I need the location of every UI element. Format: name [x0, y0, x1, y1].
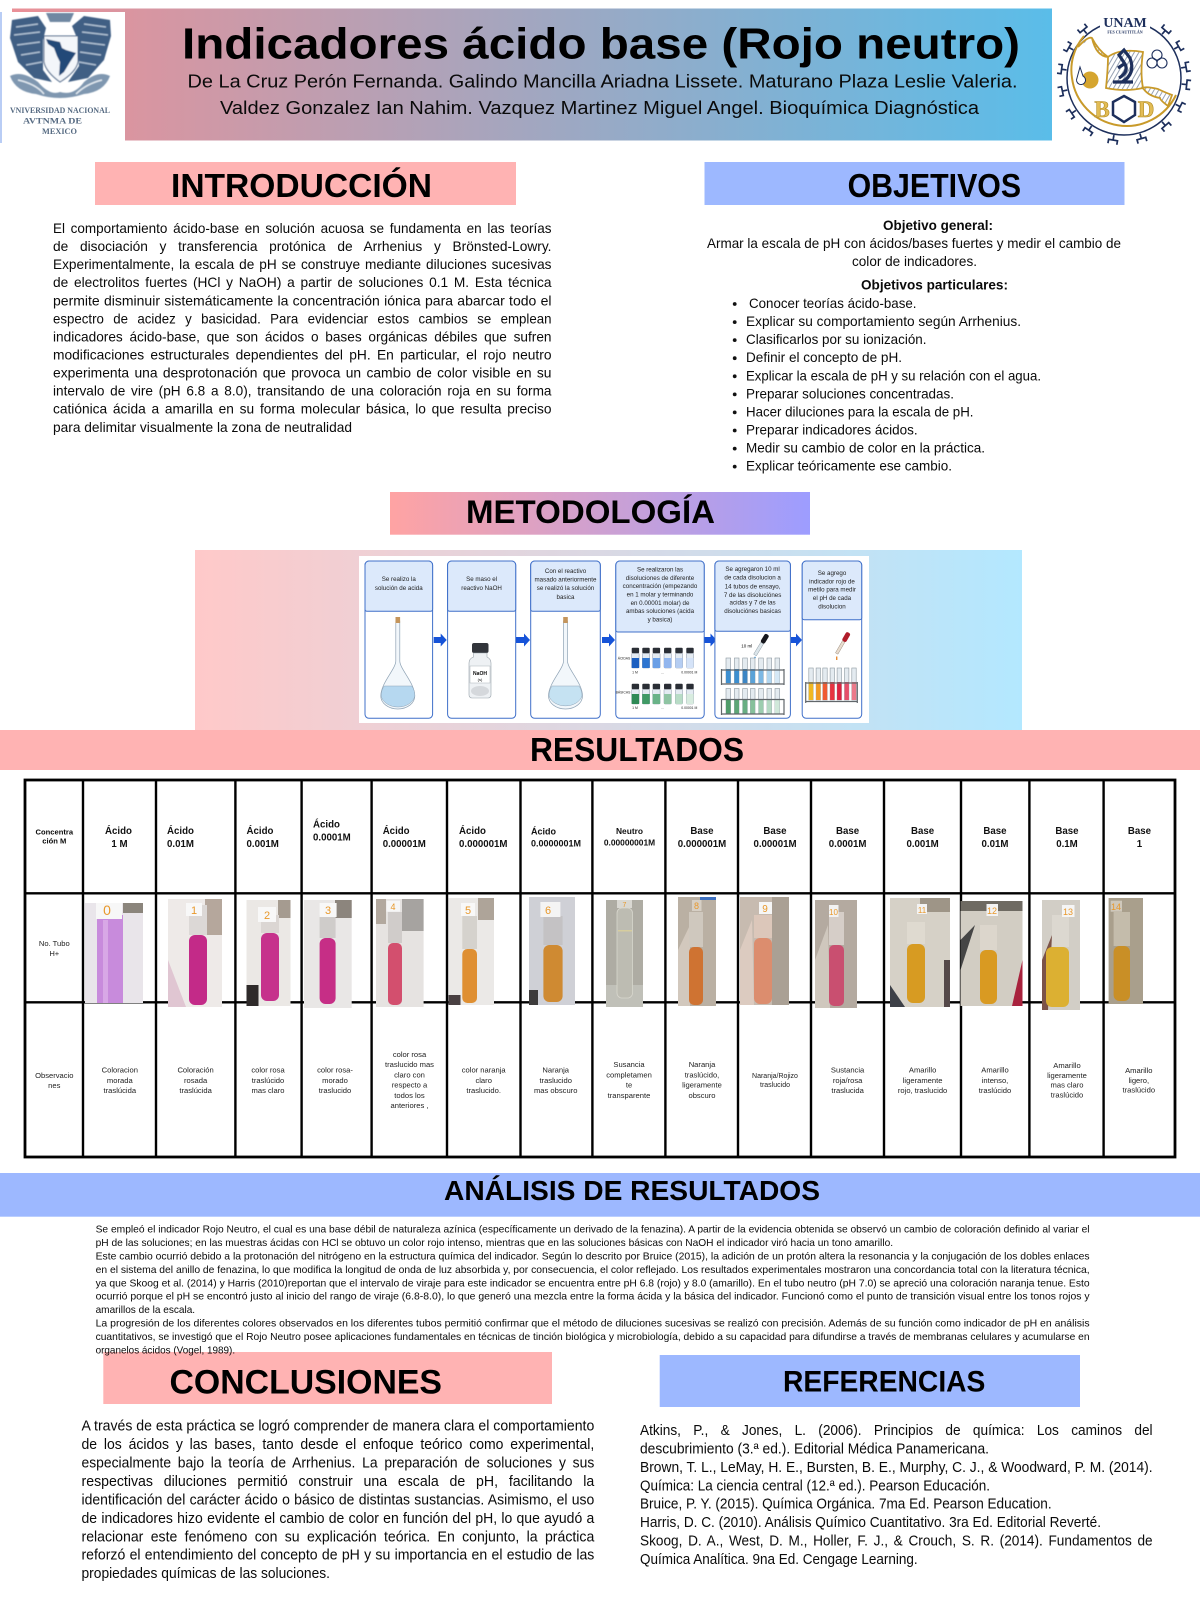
heading: referencias	[660, 1355, 1080, 1407]
photo: tube 4	[376, 899, 424, 1007]
tube rack: blue	[722, 658, 784, 685]
observations row: te	[626, 1081, 632, 1090]
logo: UNAM FES Cuautitlan BQD	[1052, 10, 1200, 145]
step 4: dilutions: concentración (empezando	[623, 583, 698, 590]
step 5: 14 test tubes: 14 tubos de ensayo,	[725, 583, 781, 590]
observations row: morado	[322, 1076, 348, 1085]
step 1: acid solution: solución de acida	[375, 585, 423, 592]
observations row: traslúcido	[1051, 1090, 1083, 1099]
observations row: rosada	[184, 1076, 208, 1085]
table header row: Ácido	[313, 820, 340, 830]
step 4: dilutions: ambas soluciones (acida	[626, 608, 695, 615]
text: objetivo general: Armar la escala de pH con ácidos/bases fuertes y medir el cambio de	[707, 235, 1121, 251]
table header row: Base	[690, 826, 714, 837]
table header row: 0.00001M	[383, 839, 426, 850]
vials: bases	[616, 684, 697, 710]
observations row: traslucido	[539, 1076, 572, 1085]
text block: referencias: Química: La ciencia central (12.ª ed.). Pearson Educación.	[640, 1478, 990, 1494]
step 2: NaOH reagent: NaOH	[473, 671, 487, 677]
step 4: dilutions: disoluciones de diferente	[626, 575, 695, 582]
table header row: Concentra	[36, 828, 74, 836]
table header row: 0.001M	[906, 839, 939, 850]
logo: UNAM FES Cuautitlan BQD: B	[1094, 97, 1110, 122]
step 5: 14 test tubes: Se agregaron 10 ml	[725, 566, 780, 573]
text: objetivos particulares: Definir el concepto de pH.	[746, 349, 902, 365]
observations row: morada	[107, 1076, 133, 1085]
text block: analisis de resultados: en el sistema del anillo de fenazina, lo que modifica la longitud de onda de luz absorbida y, por consecuencia, el color reflejado. Los resultados experimentales mostraron una concordancia total con la literatura técnica,	[96, 1265, 1090, 1276]
table header row: ción M	[42, 836, 66, 846]
observations row: color naranja	[462, 1066, 506, 1075]
text block: introduccion: experimenta una desprotonación que provoca un cambio de color visible en su	[53, 365, 552, 381]
observations row: Naranja	[689, 1060, 716, 1069]
step 6: indicator: el pH de cada	[813, 595, 852, 602]
table header row: Ácido	[167, 826, 194, 837]
photo: tube 5: 5	[465, 905, 471, 917]
observations row: completamen	[606, 1070, 652, 1080]
table header row: 0.000001M	[678, 839, 726, 850]
panel: referencias	[640, 1355, 1153, 1568]
table header row: Base	[836, 826, 860, 837]
photo: tube 8: 8	[694, 901, 699, 911]
logo: UNAM FES Cuautitlan BQD: UNAM	[1103, 16, 1147, 31]
logo: UNAM FES Cuautitlan BQD: D	[1138, 97, 1154, 122]
text block: analisis de resultados: amarillos de la escala.	[96, 1305, 195, 1316]
authors	[188, 72, 1018, 118]
table header row: 0.000001M	[459, 839, 507, 850]
table header row: 0.001M	[246, 839, 279, 850]
photo: tube 1: 1	[191, 905, 197, 917]
crest motto: VNIVERSIDAD NACIONAL	[10, 105, 110, 115]
step 6: indicator: disolucion	[818, 603, 846, 610]
vials: acids	[618, 648, 697, 674]
arrow	[704, 634, 716, 646]
table header row: 0.0000001M	[531, 838, 581, 848]
step 2: NaOH reagent: (s)	[478, 677, 483, 682]
row label: no. tubo	[39, 939, 70, 958]
row label: observaciones	[35, 1071, 74, 1090]
heading: introduccion	[95, 162, 516, 205]
step 2: NaOH reagent: reactivo NaOH	[461, 585, 502, 592]
photo: tube 7 neutral: 7	[623, 902, 627, 909]
row label: observaciones: Observacio	[35, 1071, 74, 1080]
observations row: ligeramente	[682, 1081, 722, 1090]
table header row: 0.00001M	[753, 839, 797, 850]
step 4: dilutions: y basica)	[648, 616, 672, 624]
photo: tube 8	[678, 897, 716, 1006]
text block: referencias: Harris, D. C. (2010). Análisis Químico Cuantitativo. 3ra Ed. Editorial Reverté.	[640, 1515, 1101, 1531]
observations row: obscuro	[688, 1091, 716, 1100]
flow diagram	[359, 556, 869, 723]
text: objetivos particulares: Explicar la escala de pH y su relación con el agua.	[746, 367, 1041, 383]
heading: metodologia: METODOLOGÍA	[466, 494, 715, 530]
step 5: 14 test tubes: 7 de las disoluciónes	[724, 592, 781, 599]
table header row: Base	[983, 826, 1007, 837]
step 4: dilutions	[616, 561, 704, 718]
observations row: traslúcido	[252, 1076, 284, 1085]
text block: conclusiones: respectivas diluciones permitió construir una escala de pH, facilitando la	[82, 1474, 594, 1490]
photo: tube 14: 14	[1111, 902, 1121, 912]
observations row: Naranja	[542, 1066, 570, 1075]
observations row: Coloración	[177, 1066, 214, 1075]
observations row: claro con	[394, 1070, 425, 1080]
observations row: mas obscuro	[534, 1086, 577, 1095]
table header row: 0.01M	[982, 839, 1008, 850]
observations row: roja/rosa	[833, 1076, 863, 1085]
step 2: NaOH reagent: Se maso el	[466, 576, 497, 583]
table header row: Base	[911, 826, 935, 837]
title: Indicadores ácido base (Rojo neutro)	[182, 20, 1020, 68]
text block: introduccion: indicadores ácido-base, que son ácidos o bases orgánicas débiles que sufren	[53, 328, 552, 344]
vials: bases: BÁSICAS	[616, 690, 631, 694]
arrow	[602, 634, 615, 646]
heading: referencias: REFERENCIAS	[783, 1366, 985, 1399]
step 6: indicator	[802, 561, 862, 718]
observations row: Amarillo	[1125, 1066, 1153, 1075]
step 5: 14 test tubes: disoluciónes basicas	[724, 608, 781, 615]
observations row: Susancia	[613, 1060, 645, 1069]
text block: introduccion: modificaciones estructurales dependientes del pH. En particular, el rojo neutro	[53, 346, 552, 362]
header banner	[12, 8, 1052, 140]
icon: dropper	[753, 633, 769, 656]
text block: referencias	[640, 1423, 1153, 1568]
text block: introduccion: intervalo de vire (pH 6.8 a 8.0), transitando de una coloración roja en su forma	[53, 383, 552, 399]
photo: tube 2: 2	[264, 910, 270, 922]
observations row: traslúcido,	[685, 1070, 719, 1080]
step 2: NaOH reagent	[448, 561, 516, 718]
tube rack: indicator colours	[806, 668, 857, 703]
text: objetivos particulares: Conocer teorías ácido-base.	[749, 295, 916, 311]
photo: tube 14	[1109, 898, 1143, 1004]
text: objetivo general: color de indicadores.	[852, 253, 977, 269]
heading: resultados: RESULTADOS	[530, 731, 744, 768]
text block: analisis de resultados: pH de las soluciones; en las muestras ácidas con HCl se obtuvo un color rojo intenso, mientras que en las soluciones básicas con NaOH el indicador viró hacia un tono amarillo.	[96, 1238, 893, 1249]
text block: referencias: descubrimiento (3.ª ed.). Editorial Médica Panamericana.	[640, 1441, 989, 1457]
heading: objetivos	[704, 162, 1124, 205]
icon: red dropper	[835, 632, 851, 655]
photo: tube 9: 9	[762, 904, 768, 915]
heading: conclusiones	[103, 1352, 552, 1404]
photo: tube 3	[304, 900, 352, 1008]
vials: acids: 1 M	[632, 670, 638, 674]
text block: introduccion: para delimitar visualmente la zona de neutralidad	[53, 419, 352, 435]
arrow	[791, 634, 802, 646]
text block: referencias: Bruice, P. Y. (2015). Química Orgánica. 7ma Ed. Pearson Education.	[640, 1497, 1052, 1513]
text block: analisis de resultados: La progresión de los diferentes colores observados en los diferentes tubos permitió confirmar que el método de diluciones sucesivas se realizó con precisión. Además de su función como indicador de pH en análisis	[96, 1318, 1090, 1330]
observations row: claro	[475, 1076, 492, 1085]
step 4: dilutions: en 0.00001 molar) de	[631, 600, 690, 607]
text block: conclusiones: relacionar este fenómeno con su explicación teórica. En conjunto, la práctica	[82, 1529, 594, 1545]
photo: tube 6	[529, 897, 575, 1005]
text block: conclusiones: especialmente bajo la teoría de Arrhenius. La preparación de soluciones y sus	[82, 1456, 594, 1472]
text block: analisis de resultados: organelos ácidos (Vogel, 1989).	[96, 1345, 235, 1356]
text: objetivos particulares: Explicar teóricamente ese cambio.	[746, 458, 952, 474]
table header row	[36, 820, 1152, 850]
table header row: Ácido	[531, 826, 557, 836]
photo: tube 7 neutral	[606, 900, 643, 1007]
step 3: basic solution: se realizó la solución	[537, 585, 595, 592]
text block: referencias: Brown, T. L., LeMay, H. E., Bursten, B. E., Murphy, C. J., & Woodward, P. M. (2014).	[640, 1460, 1153, 1476]
text: objetivos particulares: Medir su cambio de color en la práctica.	[746, 440, 985, 456]
photo: tube 4: 4	[390, 902, 396, 912]
step 5: 14 test tubes: acidas y 7 de las	[730, 599, 776, 606]
photo: tube 9	[740, 897, 789, 1005]
observations row: traslucida	[831, 1086, 865, 1095]
step 1: acid solution: Se realizo la	[382, 576, 416, 583]
text block: conclusiones: de indicadores hizo evidente el cambio de color en función del pH, lo que ayudó a	[82, 1511, 594, 1527]
observations row: traslucido	[760, 1082, 790, 1089]
text: objetivos particulares: Objetivos particulares:	[861, 277, 1008, 293]
table header row: 0.0001M	[313, 832, 351, 844]
step 3: basic solution: basica	[557, 594, 575, 601]
text block: referencias: Química Analítica. 9na Ed. Cengage Learning.	[640, 1552, 918, 1568]
heading: analisis de resultados	[0, 1173, 1200, 1217]
text block: analisis de resultados: Este cambio ocurrió debido a la protonación del nitrógeno en la estructura química del indicador. Según lo descrito por Bruice (2015), la adición de un protón altera la resonancia y la conjugación de los dobles enlaces	[96, 1252, 1090, 1262]
table header row: 0.1M	[1056, 839, 1078, 850]
results table	[25, 780, 1175, 1157]
step 3: basic solution	[531, 561, 600, 718]
authors: De La Cruz Perón Fernanda. Galindo Mancilla Ariadna Lissete. Maturano Plaza Leslie Valeria.	[188, 72, 1018, 92]
step 4: dilutions: Se realizaron las	[637, 566, 683, 574]
step 5: 14 test tubes	[715, 561, 790, 718]
observations row: mas claro	[1051, 1080, 1083, 1090]
table header row: 0.00000001M	[604, 838, 655, 848]
photo: tube 11: 11	[918, 906, 927, 915]
photo: tube 10	[815, 900, 857, 1008]
step 3: basic solution: masado anteriormente	[535, 577, 597, 584]
text: objetivo general	[707, 217, 1121, 269]
authors: Valdez Gonzalez Ian Nahim. Vazquez Martinez Miguel Angel. Bioquímica Diagnóstica	[220, 98, 980, 118]
observations row: Coloracion	[102, 1066, 138, 1075]
text: objetivos particulares: Hacer diluciones para la escala de pH.	[746, 403, 974, 419]
heading: resultados	[0, 730, 1200, 770]
observations row: Sustancia	[831, 1066, 865, 1075]
text block: introduccion: Experimentalmente, la escala de pH se construye mediante diluciones sucesivas	[53, 256, 552, 272]
table header row: Base	[763, 826, 787, 837]
text: objetivos particulares: Preparar soluciones concentradas.	[746, 385, 954, 401]
observations row: Amarillo	[1053, 1061, 1081, 1070]
photo: tube 13: 13	[1063, 907, 1073, 917]
tube rack: green	[722, 688, 784, 715]
observations row	[102, 1050, 1155, 1110]
tube photos	[85, 897, 1143, 1010]
crest motto	[10, 105, 110, 136]
observations row: intenso,	[982, 1076, 1008, 1085]
text block: analisis de resultados: ocurrió porque el pH se encontró justo al inicio del rango de viraje (6.8-8.0), lo que generó una mezcla entre la forma ácida y la básica del indicador. Funcionó como el punto de transición visual entre los tonos rojos y	[96, 1292, 1090, 1303]
vials: bases: 1 M	[632, 706, 638, 710]
heading: objetivos: OBJETIVOS	[848, 167, 1021, 204]
heading: metodologia	[390, 492, 810, 535]
observations row: mas claro	[252, 1086, 284, 1095]
table header row: 1	[1137, 839, 1143, 850]
table header row: Neutro	[616, 826, 643, 836]
observations row: transparente	[608, 1091, 650, 1100]
panel: objetivos	[704, 162, 1124, 474]
text block: analisis de resultados: cuantitativos, se investigó que el Rojo Neutro posee aplicaciones fundamentales en técnicas de tinción biológica y microbiología, debido a su capacidad para difundirse a través de membranas celulares y acumularse en	[96, 1332, 1090, 1343]
step 6: indicator: metilo para medir	[808, 586, 856, 593]
text block: introduccion: de electrolitos fuertes (HCl y NaOH) a partir de soluciones 0.1 M. Esta técnica	[53, 274, 552, 290]
observations row: Naranja/Rojizo	[752, 1073, 798, 1080]
text block: analisis de resultados: Se empleó el indicador Rojo Neutro, el cual es una base débil de naturaleza azínica (específicamente un derivado de la fenazina). A partir de la evidencia obtenida se observó un cambio de coloración definido al variar el	[96, 1225, 1090, 1236]
crest motto: MEXICO	[42, 126, 77, 136]
observations row: traslucido	[319, 1086, 351, 1095]
text block: conclusiones	[82, 1419, 594, 1582]
panel: methodology background	[195, 550, 1022, 730]
photo: tube 13	[1042, 900, 1080, 1010]
row label: observaciones: nes	[48, 1081, 61, 1090]
step 3: basic solution: Con el reactivo	[545, 568, 587, 575]
photo: tube 10: 10	[829, 908, 838, 917]
arrow	[434, 634, 447, 646]
photo: tube 11	[890, 898, 950, 1007]
table header row: Base	[1055, 826, 1079, 837]
observations row: todos los	[394, 1091, 425, 1100]
observations row: ligeramente	[1047, 1071, 1087, 1080]
observations row: rojo, traslucido	[898, 1086, 947, 1095]
photo: tube 0	[85, 902, 143, 1003]
text block: analisis de resultados: ya que Skoog et al. (2014) y Harris (2010)reportan que el intervalo de viraje para este indicador se encuentra entre pH 6.8 (rojo) y 8.0 (amarillo). En el tubo neutro (pH 7.0) se apreció una coloración naranja tenue. Esto	[96, 1278, 1090, 1289]
logo: UNAM FES Cuautitlan BQD: FES CUAUTITLÁN	[1107, 30, 1143, 34]
observations row: color rosa	[251, 1066, 285, 1075]
vials: acids: ...	[661, 670, 664, 674]
text: objetivos particulares: Clasificarlos por su ionización.	[746, 331, 926, 347]
observations row: traslúcido	[1123, 1086, 1155, 1094]
photo: tube 12: 12	[987, 906, 997, 916]
step 5: 14 test tubes: de cada disolucion a	[724, 575, 781, 582]
table header row: Base	[1128, 826, 1152, 837]
text block: introduccion: permite disminuir sistemáticamente la concentración iónica para abarcar todo el	[53, 292, 552, 308]
text: objetivos particulares: Preparar indicadores ácidos.	[746, 422, 918, 438]
table header row: Ácido	[105, 826, 132, 837]
text block: introduccion: espectro de acidez y basicidad. Para evidenciar estos cambios se emplean	[53, 310, 552, 326]
text block: analisis de resultados	[96, 1225, 1090, 1356]
arrow	[516, 634, 530, 646]
text block: introduccion: catiónica ácida a amarilla en su forma molecular básica, lo que resulta preciso	[53, 401, 552, 417]
observations row: Amarillo	[909, 1066, 936, 1075]
observations row: anteriores ,	[390, 1101, 428, 1110]
table header row: Ácido	[246, 826, 273, 837]
vials: bases: 0.00001 M	[681, 706, 697, 710]
vials: acids: ÁCIDAS	[618, 656, 631, 660]
observations row: color rosa-	[317, 1066, 353, 1075]
text block: referencias: Atkins, P., & Jones, L. (2006). Principios de química: Los caminos del	[640, 1423, 1153, 1439]
observations row: ligero,	[1128, 1076, 1149, 1085]
text block: conclusiones: de los ácidos y las bases, tanto desde el enfoque teórico como experimental,	[82, 1437, 594, 1453]
vials: bases: ...	[661, 706, 664, 710]
heading: conclusiones: CONCLUSIONES	[170, 1364, 442, 1402]
table header row: 1 M	[111, 839, 128, 850]
heading: introduccion: INTRODUCCIÓN	[171, 167, 432, 204]
text: objetivo general: Objetivo general:	[883, 217, 993, 233]
photo: tube 3: 3	[325, 905, 331, 917]
observations row: color rosa	[393, 1050, 427, 1059]
observations row: traslúcida	[179, 1086, 213, 1095]
text block: conclusiones: identificación del carácter ácido o básico de distintas sustancias. Asimismo, el uso	[82, 1492, 594, 1508]
crest motto: AVTNMA DE	[23, 116, 82, 126]
logo: UNAM university crest	[0, 12, 125, 143]
photo: tube 1	[168, 899, 222, 1007]
observations row: traslúcido	[979, 1086, 1011, 1095]
observations row: traslucido mas	[385, 1060, 434, 1069]
observations row: traslucido.	[466, 1086, 501, 1095]
heading: analisis de resultados: ANÁLISIS DE RESULTADOS	[444, 1175, 820, 1206]
step 1: acid solution	[365, 561, 433, 718]
photo: tube 6: 6	[545, 905, 551, 917]
text block: conclusiones: propiedades químicas de las soluciones.	[82, 1566, 330, 1582]
row label: no. tubo: No. Tubo	[39, 939, 70, 948]
observations row: ligeramente	[903, 1076, 942, 1085]
table header row: 0.0001M	[829, 839, 866, 850]
panel: conclusiones	[82, 1352, 594, 1582]
vials: acids: 0.00001 M	[681, 670, 697, 674]
text block: introduccion: de disociación y transferencia protónica de Arrhenius y Brönsted-Lowry.	[53, 238, 552, 254]
text block: conclusiones: reforzó el entendimiento del concepto de pH y su importancia en el estudio de las	[82, 1548, 594, 1564]
photo: tube 5	[448, 898, 494, 1005]
table header row: Ácido	[383, 826, 410, 837]
text block: introduccion	[53, 220, 552, 435]
observations row: Amarillo	[981, 1066, 1009, 1075]
photo: tube 12	[960, 901, 1022, 1006]
text: objetivos particulares	[733, 277, 1041, 474]
photo: tube 0: 0	[103, 902, 111, 918]
observations row: respecto a	[392, 1081, 428, 1090]
step 6: indicator: Se agrego	[818, 570, 847, 577]
text block: referencias: Skoog, D. A., West, D. M., Holler, F. J., & Crouch, S. R. (2014). Fundamentos de	[640, 1534, 1153, 1550]
table header row: Ácido	[459, 826, 486, 837]
text block: conclusiones: A través de esta práctica se logró comprender de manera clara el comportamiento	[82, 1419, 594, 1435]
step 4: dilutions: en 1 molar y terminando	[627, 592, 694, 598]
table header row: 0.01M	[167, 839, 194, 850]
step 6: indicator: indicador rojo de	[809, 578, 855, 585]
row label: no. tubo: H+	[49, 949, 60, 958]
text: objetivos particulares: Explicar su comportamiento según Arrhenius.	[746, 313, 1021, 329]
observations row: traslúcida	[104, 1086, 137, 1095]
panel: introduccion	[53, 162, 552, 435]
photo: tube 2	[246, 900, 290, 1006]
step 5: 14 test tubes: 10 ml	[741, 644, 752, 648]
text block: introduccion: El comportamiento ácido-base en solución acuosa se fundamenta en las teorías	[53, 220, 552, 236]
